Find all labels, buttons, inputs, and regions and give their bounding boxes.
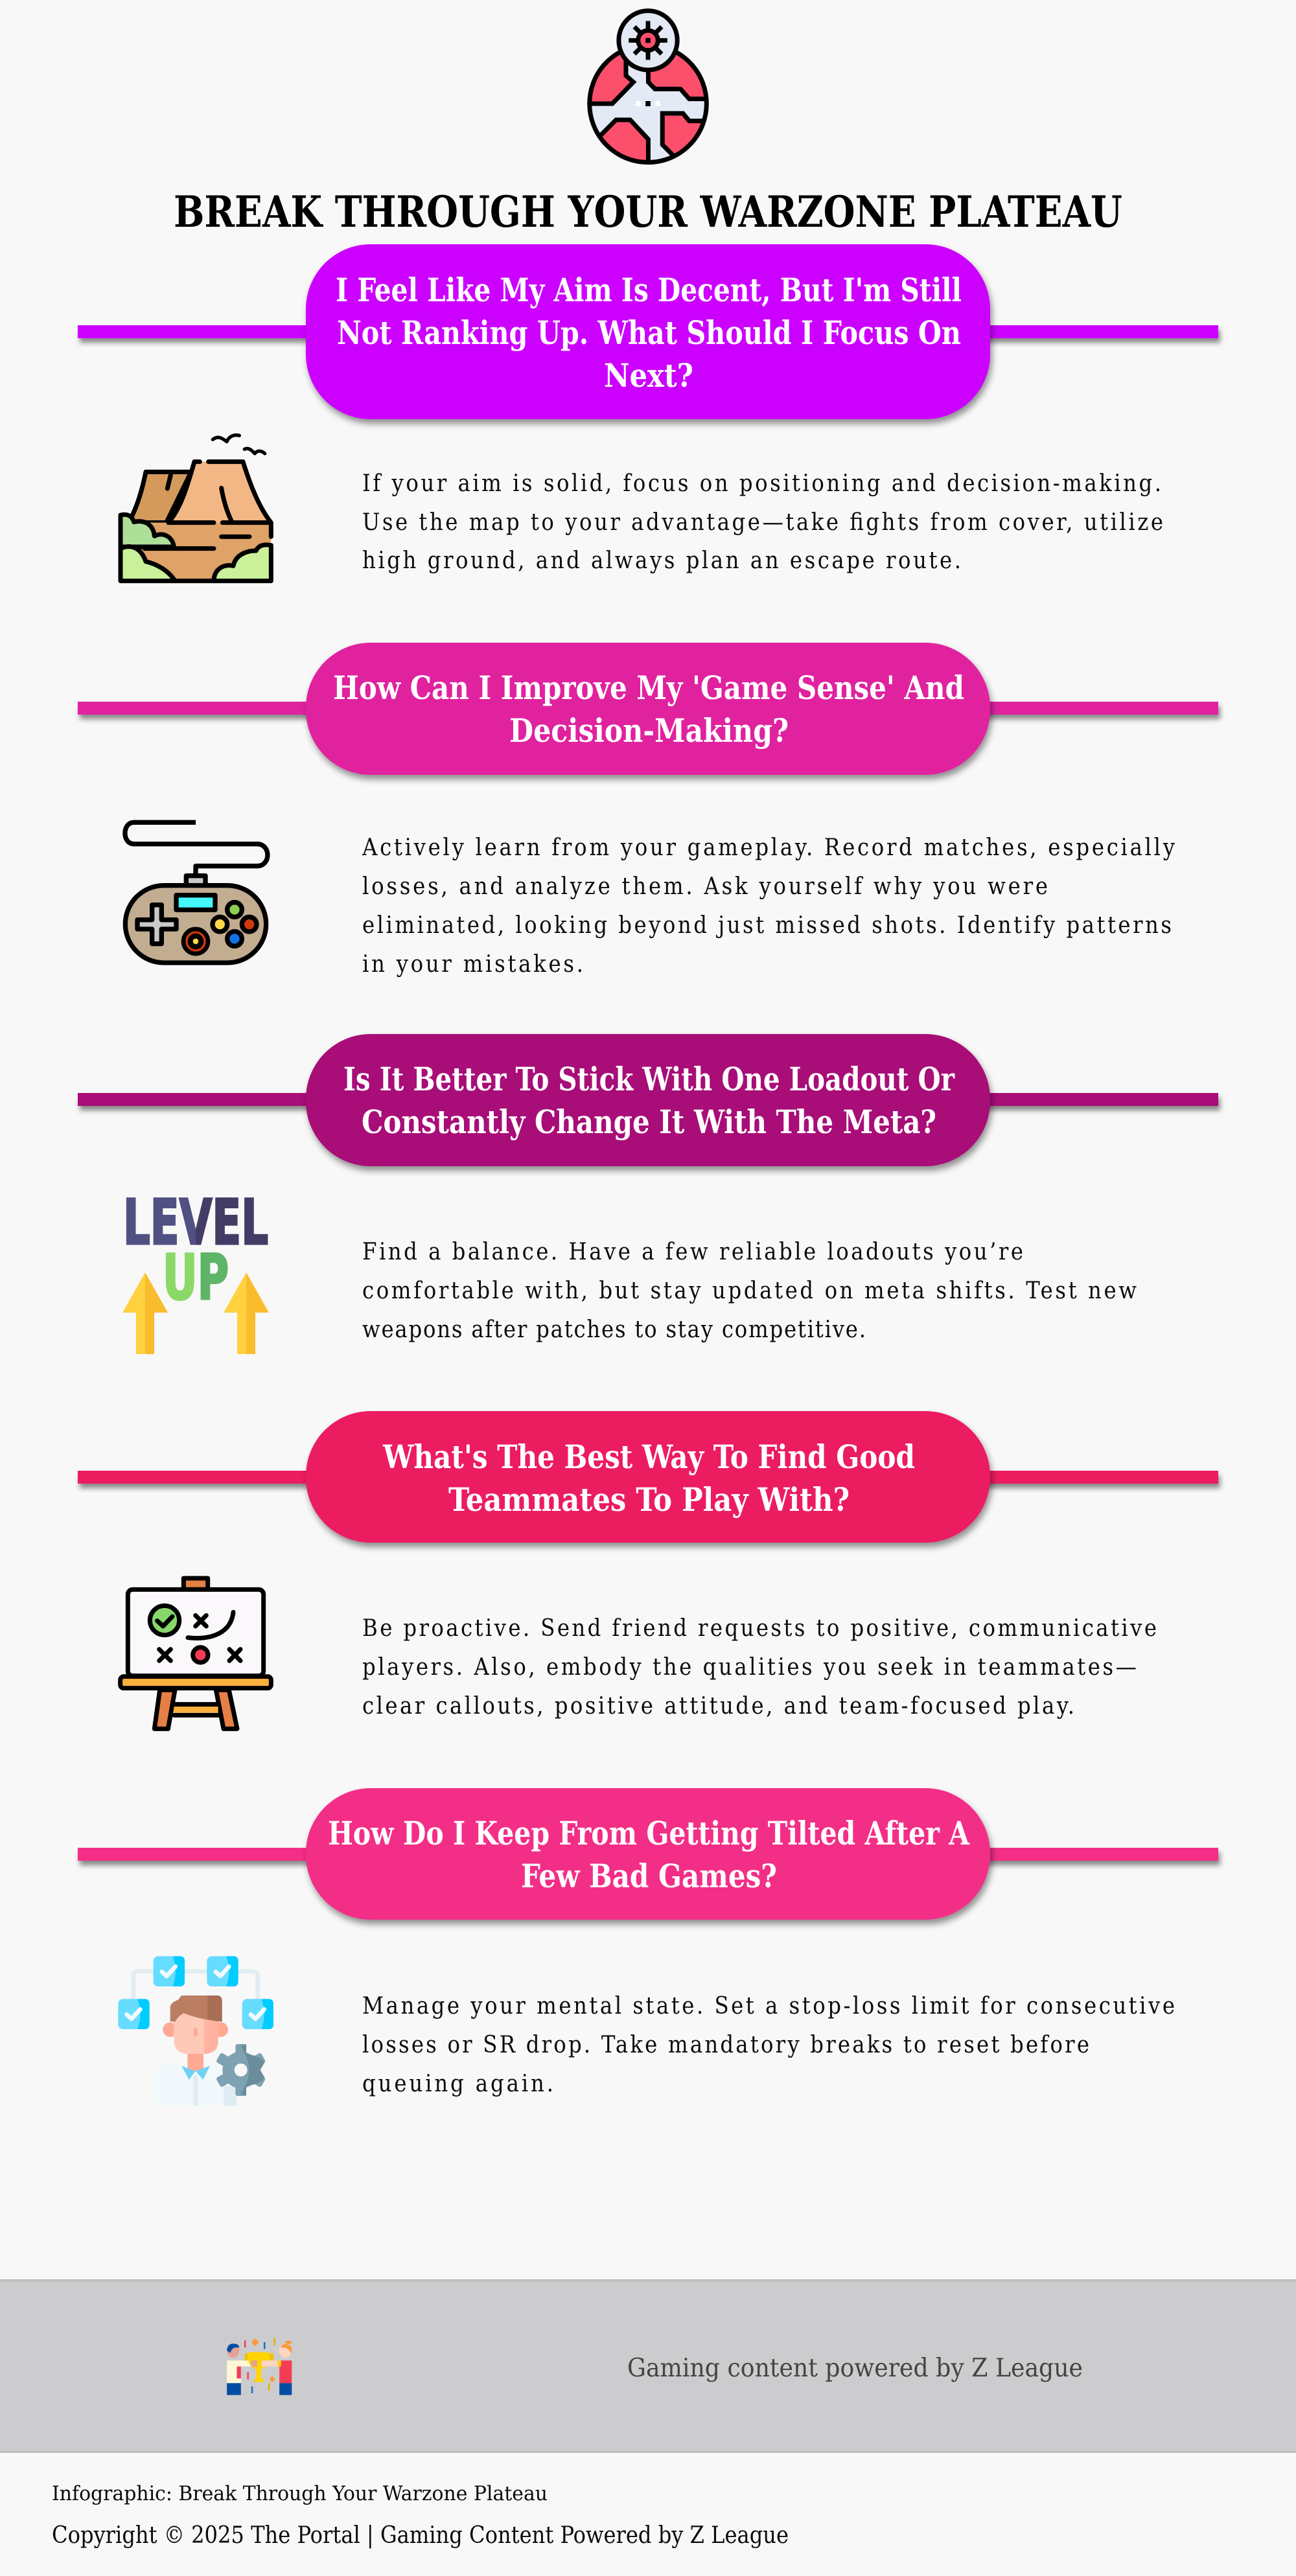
- heading pill: How Do I Keep From Getting Tilted After A: [328, 1814, 970, 1852]
- heading pill: [306, 1411, 990, 1543]
- answer text: clear callouts, positive attitude, and team-focused play.: [362, 1693, 1074, 1719]
- heading pill: [306, 244, 990, 419]
- answer text: losses or SR drop. Take mandatory breaks to reset before: [362, 2032, 1089, 2058]
- answer text: [362, 1993, 1175, 2097]
- connector line: [78, 1471, 1218, 1484]
- answer text: [362, 1615, 1157, 1719]
- heading pill: Decision-Making?: [509, 711, 789, 750]
- heading pill: [306, 1788, 990, 1920]
- infographic caption: Infographic: Break Through Your Warzone Plateau: [52, 2482, 548, 2505]
- answer text: queuing again.: [362, 2071, 553, 2097]
- answer text: If your aim is solid, focus on positioning and decision-making.: [362, 470, 1161, 497]
- answer text: eliminated, looking beyond just missed shots. Identify patterns: [362, 912, 1172, 939]
- footer band: [0, 2279, 1296, 2453]
- icon: level up: LEVEL: [123, 1186, 268, 1259]
- answer text: in your mistakes.: [362, 951, 583, 978]
- heading pill: Few Bad Games?: [521, 1857, 777, 1895]
- section 2: [78, 643, 1218, 978]
- heading pill: Not Ranking Up. What Should I Focus On: [337, 314, 961, 352]
- section 1: [78, 244, 1218, 581]
- sponsor text: Gaming content powered by Z League: [627, 2354, 1083, 2383]
- answer text: comfortable with, but stay updated on meta shifts. Test new: [362, 1278, 1137, 1304]
- answer text: [362, 834, 1175, 978]
- answer text: weapons after patches to stay competitive.: [362, 1317, 866, 1343]
- heading pill: Constantly Change It With The Meta?: [362, 1103, 936, 1141]
- heading pill: Next?: [604, 356, 693, 395]
- heading pill: Teammates To Play With?: [448, 1480, 850, 1519]
- heading pill: I Feel Like My Aim Is Decent, But I'm Still: [336, 271, 962, 309]
- answer text: Use the map to your advantage—take fights from cover, utilize: [362, 509, 1163, 536]
- heading pill: [306, 643, 990, 775]
- icon: players with trophy: [227, 2338, 292, 2395]
- heading pill: Is It Better To Stick With One Loadout Or: [343, 1060, 955, 1098]
- connector line: [78, 702, 1218, 715]
- answer text: [362, 470, 1163, 574]
- answer text: [362, 1239, 1137, 1343]
- section 4: [78, 1411, 1218, 1729]
- answer text: Be proactive. Send friend requests to positive, communicative: [362, 1615, 1157, 1642]
- title: BREAK THROUGH YOUR WARZONE PLATEAU: [174, 187, 1122, 237]
- connector line: [78, 1093, 1218, 1106]
- copyright line: Copyright © 2025 The Portal | Gaming Content Powered by Z League: [52, 2522, 789, 2549]
- answer text: players. Also, embody the qualities you seek in teammates—: [362, 1654, 1137, 1681]
- heading pill: [306, 1034, 990, 1166]
- answer text: Find a balance. Have a few reliable loadouts you’re: [362, 1239, 1023, 1265]
- section 5: [78, 1788, 1218, 2106]
- icon: game controller: [125, 822, 268, 963]
- answer text: Manage your mental state. Set a stop-loss limit for consecutive: [362, 1993, 1175, 2019]
- icon: level up: UP: [163, 1241, 229, 1314]
- icon: person with checklist and gear: [118, 1956, 273, 2106]
- answer text: losses, and analyze them. Ask yourself why you were: [362, 873, 1048, 900]
- icon: cracked globe with target: [577, 11, 712, 167]
- connector line: [78, 1848, 1218, 1861]
- connector line: [78, 325, 1218, 338]
- answer text: Actively learn from your gameplay. Record matches, especially: [362, 834, 1175, 861]
- icon: mountain landscape: [121, 435, 271, 581]
- section 3: [78, 1034, 1218, 1354]
- icon: strategy board: [121, 1578, 271, 1729]
- heading pill: How Can I Improve My 'Game Sense' And: [333, 669, 964, 707]
- answer text: high ground, and always plan an escape route.: [362, 547, 961, 574]
- icon: level up: [122, 1186, 269, 1354]
- heading pill: What's The Best Way To Find Good: [382, 1438, 915, 1476]
